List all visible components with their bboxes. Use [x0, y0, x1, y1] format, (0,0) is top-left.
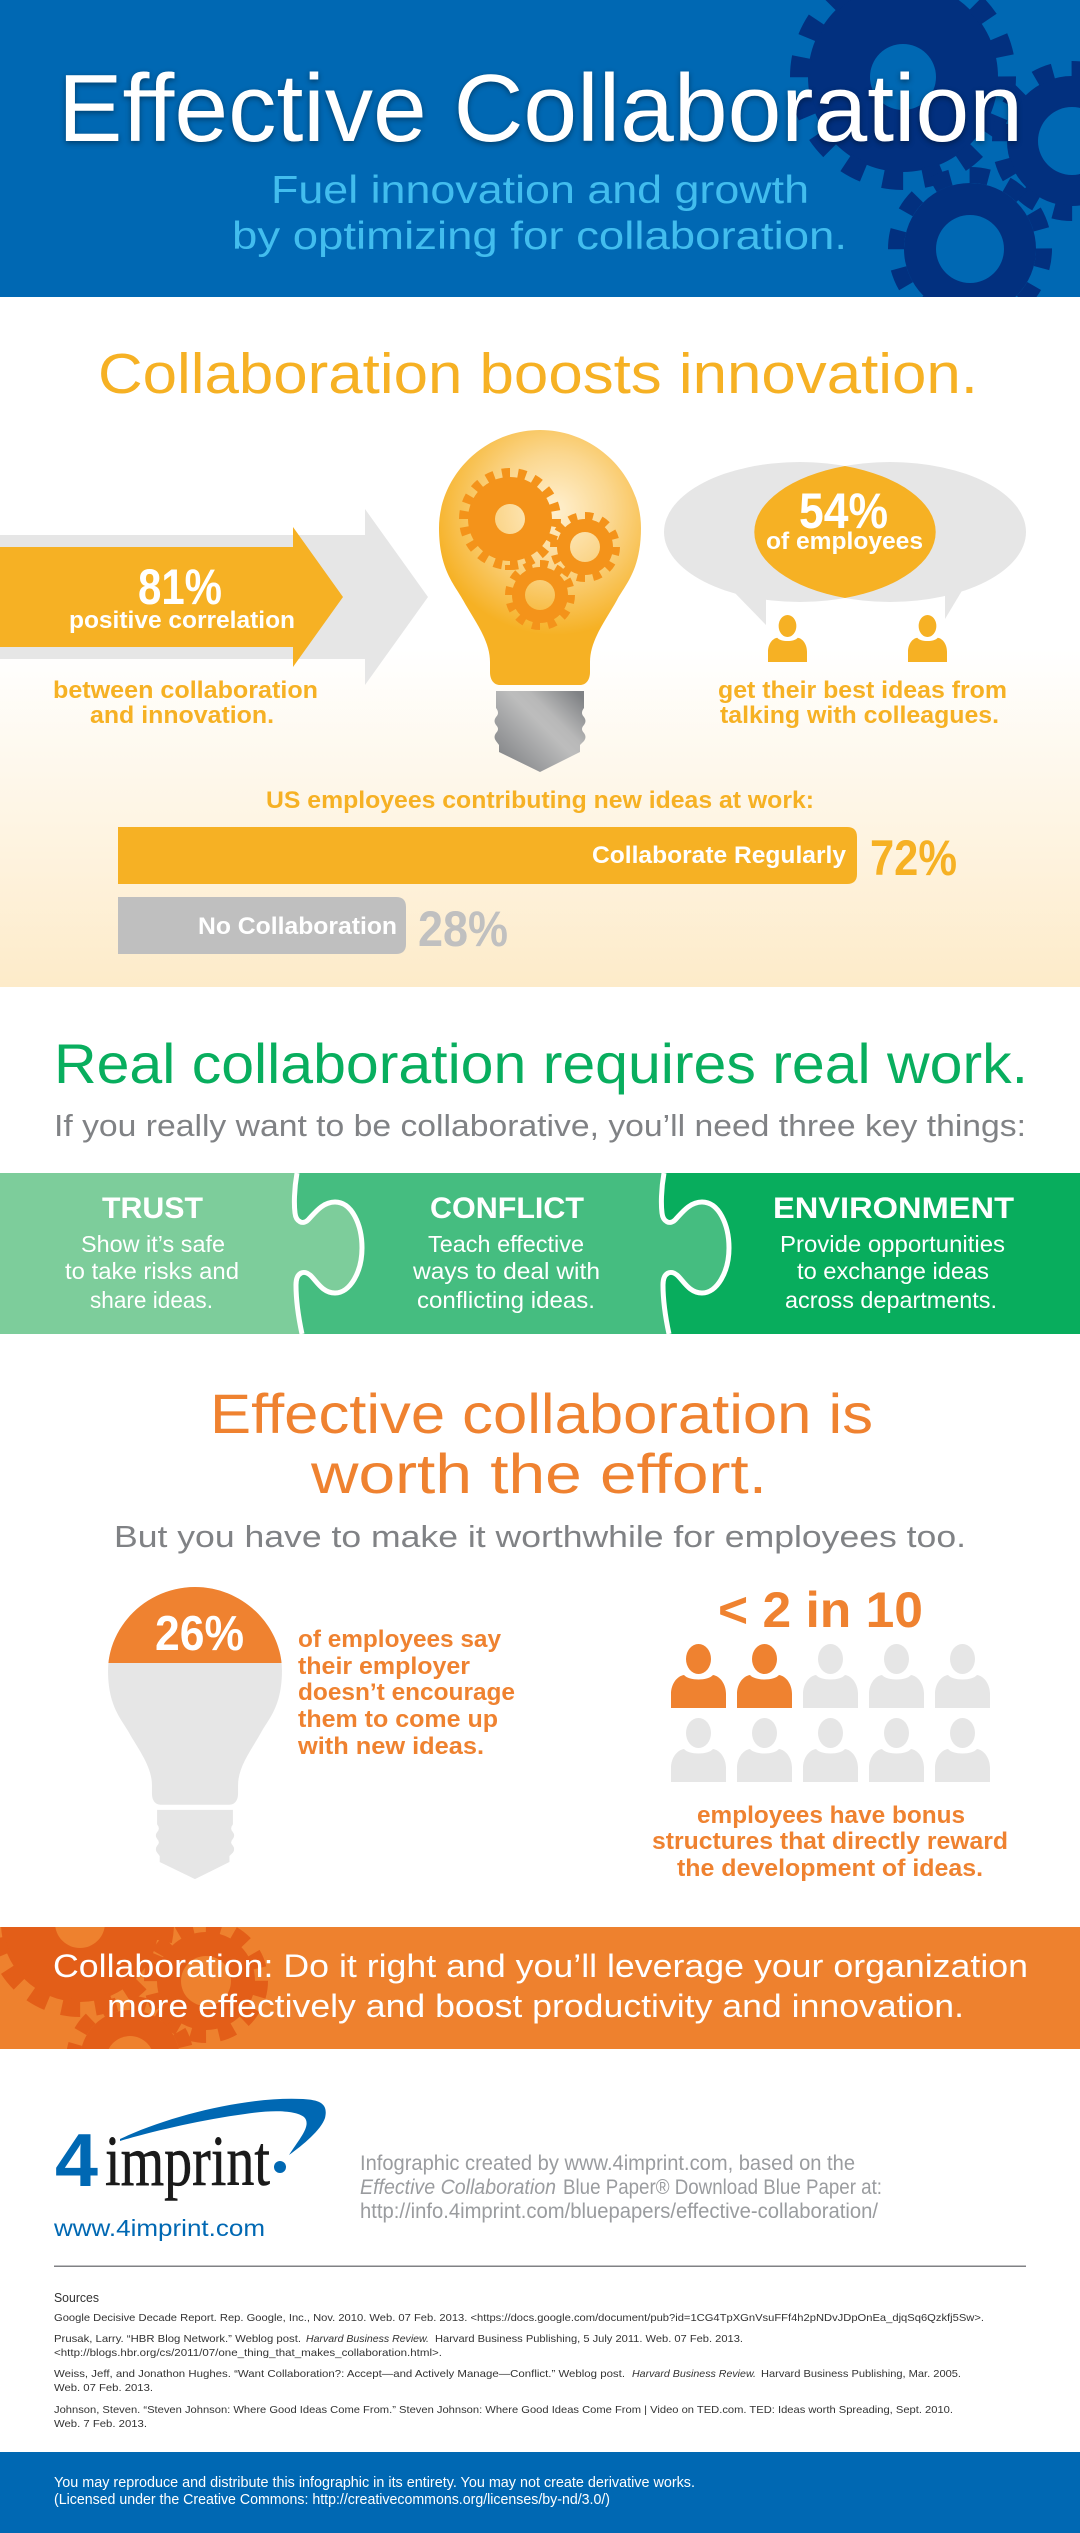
caption: structures that directly reward [652, 1828, 1008, 1855]
caption [718, 677, 1007, 729]
26%: 26% [155, 1607, 244, 1661]
positive correlation label: positive correlation [69, 607, 295, 634]
bulb base [494, 691, 586, 772]
sources [54, 2291, 984, 2430]
credit text: Effective Collaboration [360, 2176, 556, 2199]
icon: light bulb with gears [439, 430, 641, 772]
trust text: to take risks and [65, 1258, 239, 1284]
conclusion band [0, 1927, 1080, 2049]
puzzle panel: three key things [0, 1173, 1080, 1334]
heading: collaboration boosts innovation: Collaboration boosts innovation. [98, 342, 978, 406]
logo url: www.4imprint.com [53, 2215, 265, 2241]
81%: 81% [138, 559, 222, 615]
caption: doesn’t encourage [298, 1679, 515, 1706]
subtitle: Fuel innovation and growth [271, 169, 809, 212]
sources: Sources [54, 2291, 99, 2305]
54%: 54% [799, 483, 888, 539]
license text: (Licensed under the Creative Commons: http://creativecommons.org/licenses/by-nd/3.0/) [54, 2491, 610, 2508]
logo numeral: 4 [55, 2118, 98, 2202]
caption [53, 677, 318, 729]
bar chart: employees contributing new ideas [118, 787, 957, 957]
conflict text: ways to deal with [412, 1258, 600, 1284]
bar: no collaboration [118, 897, 406, 954]
logo dot [274, 2161, 286, 2173]
trust text: Show it’s safe [81, 1231, 225, 1257]
environment text: Provide opportunities [780, 1231, 1005, 1257]
sources: <http://blogs.hbr.org/cs/2011/07/one_thing_that_makes_collaboration.html>. [54, 2347, 442, 2359]
subheading: worthwhile for employees: But you have to make it worthwhile for employees too. [114, 1519, 966, 1554]
conflict text: conflicting ideas. [417, 1287, 595, 1313]
caption: with new ideas. [297, 1733, 484, 1760]
arrow stat: 81% positive correlation [0, 509, 428, 729]
orange fill of bulb [108, 1587, 282, 1663]
caption [297, 1626, 515, 1760]
bar label: Collaborate Regularly [592, 842, 847, 869]
icon: header gears [800, 0, 1080, 323]
logo word: imprint [105, 2121, 270, 2201]
sources: Google Decisive Decade Report. Rep. Google, Inc., Nov. 2010. Web. 07 Feb. 2013. <https://docs.google.com/document/pub?id=1CG4TpXGnVsuFFf4h2pNDvJDpOnEa_djqSq6Qzkfj5Sw>. [54, 2312, 984, 2324]
stat: fewer than 2 in 10 [652, 1582, 1008, 1882]
gray arrow [0, 509, 428, 685]
sources: Harvard Business Review. [632, 2368, 756, 2380]
bulb glass [439, 430, 641, 685]
gray bubbles [664, 462, 1026, 625]
heading: worth the effort [210, 1382, 873, 1505]
bar: collaborate regularly [118, 827, 857, 884]
caption [652, 1802, 1008, 1882]
conflict text: Teach effective [428, 1231, 584, 1257]
header band [0, 0, 1080, 323]
conflict text: CONFLICT [430, 1192, 584, 1225]
piece: conflict [0, 1173, 729, 1334]
value: < 2 in 10 [718, 1582, 923, 1638]
sources: Harvard Business Publishing, 5 July 2011. Web. 07 Feb. 2013. [435, 2333, 743, 2345]
orange arrow [0, 527, 343, 667]
heading: real collaboration: Real collaboration requires real work. [54, 1032, 1028, 1095]
subtitle [232, 169, 847, 258]
subheading: three key things: If you really want to be collaborative, you’ll need three key things: [54, 1108, 1026, 1143]
sources: Johnson, Steven. “Steven Johnson: Where Good Ideas Come From.” Steven Johnson: Where Good Ideas Come From | Video on TED.com. TED: Ideas worth Spreading, Sept. 2010. [54, 2404, 953, 2416]
sources: Weiss, Jeff, and Jonathon Hughes. “Want Collaboration?: Accept—and Actively Manage—Conflict.” Weblog post. [54, 2368, 625, 2380]
overlap lens [754, 466, 936, 598]
title: Effective Collaboration [58, 55, 1023, 162]
sources: Harvard Business Review. [306, 2333, 429, 2345]
icon: person right [908, 615, 947, 662]
footer band [0, 2452, 1080, 2533]
credit text [360, 2152, 882, 2223]
environment text: across departments. [785, 1287, 997, 1313]
bar label: No Collaboration [198, 913, 397, 940]
gear large [464, 473, 556, 565]
credit text: Blue Paper® Download Blue Paper at: [563, 2176, 882, 2199]
stat: 26% bulb [108, 1587, 515, 1879]
chart title: US employees contributing new ideas at work: [266, 787, 814, 814]
conclusion text: Collaboration: Do it right and you’ll leverage your organization [53, 1948, 1028, 1984]
icon: gray bulb [108, 1587, 282, 1879]
heading: worth the effort: Effective collaboration is [210, 1382, 873, 1445]
sources: Web. 7 Feb. 2013. [54, 2418, 147, 2430]
caption: of employees say [298, 1626, 502, 1653]
trust text: TRUST [102, 1192, 203, 1225]
swoosh [120, 2099, 326, 2155]
logo: 4imprint [53, 2099, 326, 2241]
icon: band gears [0, 1927, 268, 2049]
conclusion text: more effectively and boost productivity and innovation. [107, 1988, 964, 2024]
icon: people grid [671, 1644, 990, 1782]
caption: talking with colleagues. [720, 702, 999, 729]
license text: You may reproduce and distribute this infographic in its entirety. You may not create derivative works. [54, 2474, 695, 2491]
environment text: ENVIRONMENT [773, 1192, 1014, 1225]
icon: person left [768, 615, 807, 662]
environment text: to exchange ideas [797, 1258, 989, 1284]
trust text [65, 1192, 239, 1313]
conflict text [412, 1192, 600, 1313]
section background: innovation [0, 650, 1080, 987]
caption: them to come up [298, 1706, 498, 1733]
sources: Prusak, Larry. “HBR Blog Network.” Weblog post. [54, 2333, 301, 2345]
conclusion text [53, 1948, 1028, 2024]
piece: environment [0, 1173, 1080, 1334]
heading: worth the effort: worth the effort. [310, 1442, 767, 1505]
subtitle: by optimizing for collaboration. [232, 215, 847, 258]
gear bottom [509, 564, 571, 626]
trust text: share ideas. [90, 1287, 213, 1313]
value 72%: 72% [870, 830, 957, 886]
caption: the development of ideas. [677, 1855, 983, 1882]
caption: get their best ideas from [718, 677, 1007, 704]
credit text: http://info.4imprint.com/bluepapers/effective-collaboration/ [360, 2200, 878, 2223]
sources: Harvard Business Publishing, Mar. 2005. [761, 2368, 961, 2380]
of employees: of employees [766, 528, 923, 555]
sources: Web. 07 Feb. 2013. [54, 2382, 153, 2394]
speech bubbles: 54% of employees [664, 462, 1026, 729]
caption: employees have bonus [697, 1802, 965, 1829]
caption: their employer [298, 1653, 470, 1680]
caption: between collaboration [53, 677, 318, 704]
piece: trust [0, 1173, 362, 1334]
credit text: Infographic created by www.4imprint.com, based on the [360, 2152, 855, 2175]
license text [54, 2474, 695, 2508]
gear right [554, 516, 616, 578]
caption: and innovation. [90, 702, 274, 729]
environment text [773, 1192, 1014, 1313]
value 28%: 28% [418, 901, 508, 957]
